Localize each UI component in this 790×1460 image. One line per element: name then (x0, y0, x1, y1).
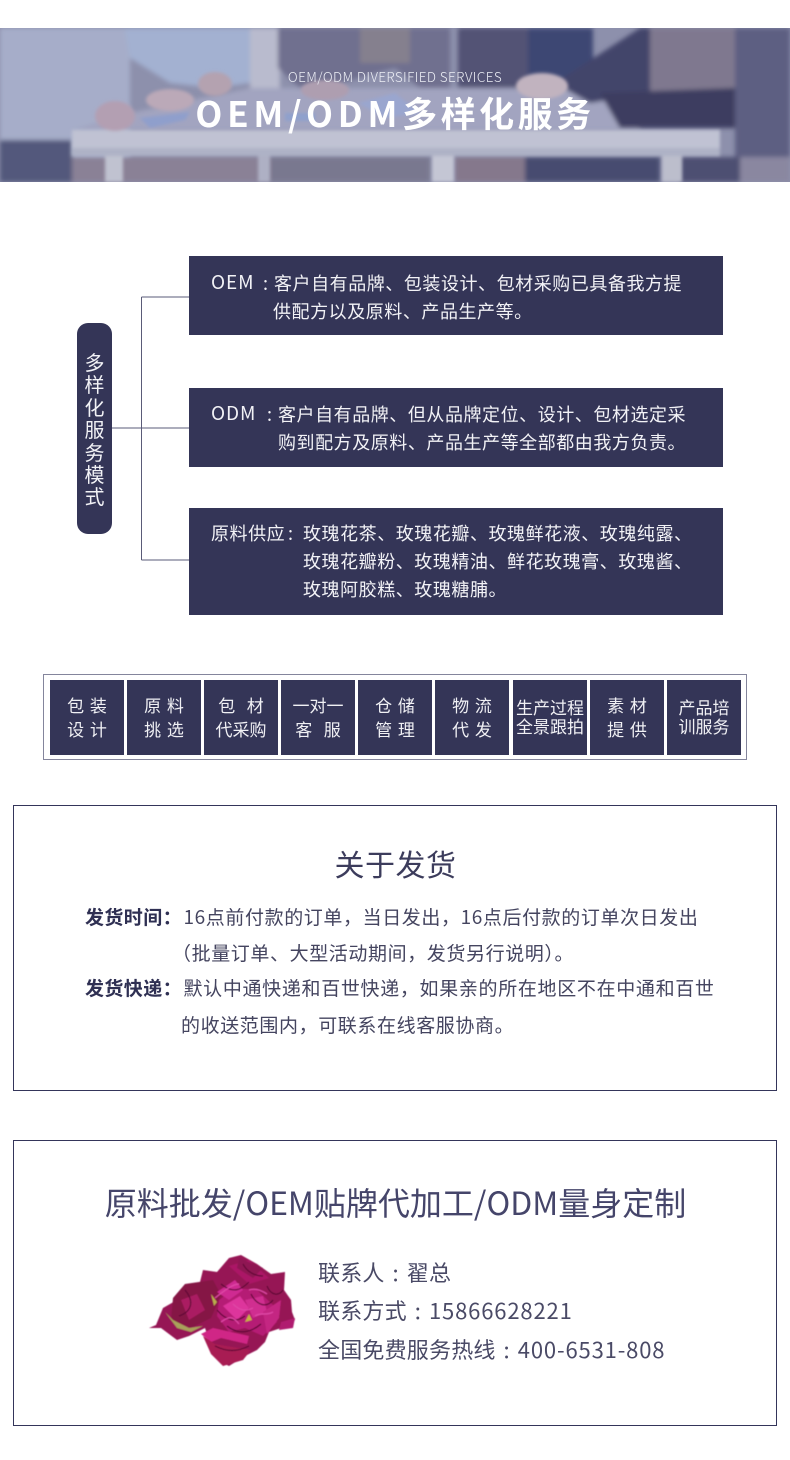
service: materials provided: 提 供 (607, 716, 647, 741)
service: packaging procurement: 包 材 (218, 692, 264, 717)
shipping time (85, 903, 698, 966)
pill: diversified service models: 务 (84, 437, 104, 466)
shipping courier: 的收送范围内，可联系在线客服协商。 (181, 1011, 514, 1038)
panel: ODM: 购到配方及原料、产品生产等全部都由我方负责。 (278, 429, 686, 455)
shipping heading: 关于发货 (334, 841, 456, 885)
service: raw material selection: 原 料 (144, 692, 184, 717)
service: logistics: 代 发 (452, 716, 492, 741)
panel: OEM: 客户自有品牌、包装设计、包材采购已具备我方提 (274, 270, 682, 296)
service: warehousing: 仓 储 (375, 692, 415, 717)
panel: OEM (189, 256, 723, 335)
panel: shipping info (13, 805, 777, 1091)
service strip (43, 674, 747, 760)
service: raw material selection: 挑 选 (144, 716, 184, 741)
service: production tracking: 生产过程 (516, 694, 584, 719)
banner title: OEM/ODM多样化服务 (195, 87, 595, 138)
panel: raw material supply (189, 508, 723, 615)
pill: diversified service models: 样 (84, 369, 104, 398)
shipping courier (85, 974, 715, 1038)
service: product training: 训服务 (678, 713, 730, 738)
banner: blurred business meeting photo with title (0, 28, 790, 182)
service: materials provided (590, 680, 664, 755)
shipping courier: 默认中通快递和百世快递，如果亲的所在地区不在中通和百世 (184, 974, 715, 1001)
service: product training: 产品培 (678, 694, 730, 719)
service: one-on-one support (281, 680, 355, 755)
shipping courier: 发货快递： (85, 974, 182, 1001)
panel: OEM: OEM (211, 268, 254, 295)
pill: diversified service models: 式 (84, 481, 104, 510)
service: production tracking (513, 680, 587, 755)
pill: diversified service models (77, 323, 112, 534)
shipping time: 发货时间： (85, 903, 182, 930)
pill: diversified service models: 化 (84, 392, 104, 421)
panel: OEM: 供配方以及原料、产品生产等。 (273, 298, 533, 324)
contact hotline: 全国免费服务热线 400-6531-808 (318, 1333, 665, 1365)
service: warehousing (358, 680, 432, 755)
panel: raw material supply: 原料供应 (211, 520, 285, 546)
contact phone: 联系方式 15866628221 (318, 1294, 573, 1326)
shipping time: （批量订单、大型活动期间，发货另行说明）。 (172, 939, 574, 966)
panel: ODM: : (267, 401, 273, 427)
service: one-on-one support: 客 服 (295, 716, 341, 741)
panel: ODM: ODM (211, 399, 256, 426)
panel: contact (13, 1140, 777, 1426)
panel: raw material supply: 玫瑰花茶、玫瑰花瓣、玫瑰鲜花液、玫瑰纯露、 (303, 520, 693, 546)
panel: ODM: 客户自有品牌、但从品牌定位、设计、包材选定采 (278, 401, 686, 427)
contact heading: 原料批发/OEM贴牌代加工/ODM量身定制 (105, 1179, 686, 1225)
service: production tracking: 全景跟拍 (516, 713, 584, 738)
panel: raw material supply: 玫瑰花瓣粉、玫瑰精油、鲜花玫瑰膏、玫瑰酱、 (303, 548, 693, 574)
service: logistics: 物 流 (452, 692, 492, 717)
service: logistics (435, 680, 509, 755)
shipping time: 16点前付款的订单，当日发出，16点后付款的订单次日发出 (184, 903, 698, 930)
banner subtitle: OEM/ODM DIVERSIFIED SERVICES (288, 66, 502, 86)
service: warehousing: 管 理 (375, 716, 415, 741)
service: packaging procurement: 代采购 (216, 716, 266, 741)
pill: diversified service models: 多 (84, 347, 104, 376)
service: product training (667, 680, 741, 755)
service: packaging design: 包 装 (67, 692, 107, 717)
pill: diversified service models: 服 (84, 414, 104, 443)
service: packaging design (50, 680, 124, 755)
contact phone: : (415, 1294, 421, 1326)
service: packaging procurement (204, 680, 278, 755)
contact hotline: : (504, 1333, 510, 1365)
service: materials provided: 素 材 (607, 692, 647, 717)
panel: OEM: : (263, 270, 269, 296)
service: packaging design: 设 计 (67, 716, 107, 741)
contact person: 联系人 翟总 (318, 1256, 451, 1288)
service: one-on-one support: 一对一 (292, 692, 344, 717)
connector lines: tree from pill to cards (112, 296, 189, 560)
service: raw material selection (127, 680, 201, 755)
panel: ODM (189, 388, 723, 467)
contact person: : (393, 1256, 399, 1288)
image: dried rose (148, 1254, 296, 1367)
panel: raw material supply: 玫瑰阿胶糕、玫瑰糖脯。 (303, 576, 507, 602)
panel: raw material supply: : (288, 520, 294, 546)
pill: diversified service models: 模 (84, 459, 104, 488)
